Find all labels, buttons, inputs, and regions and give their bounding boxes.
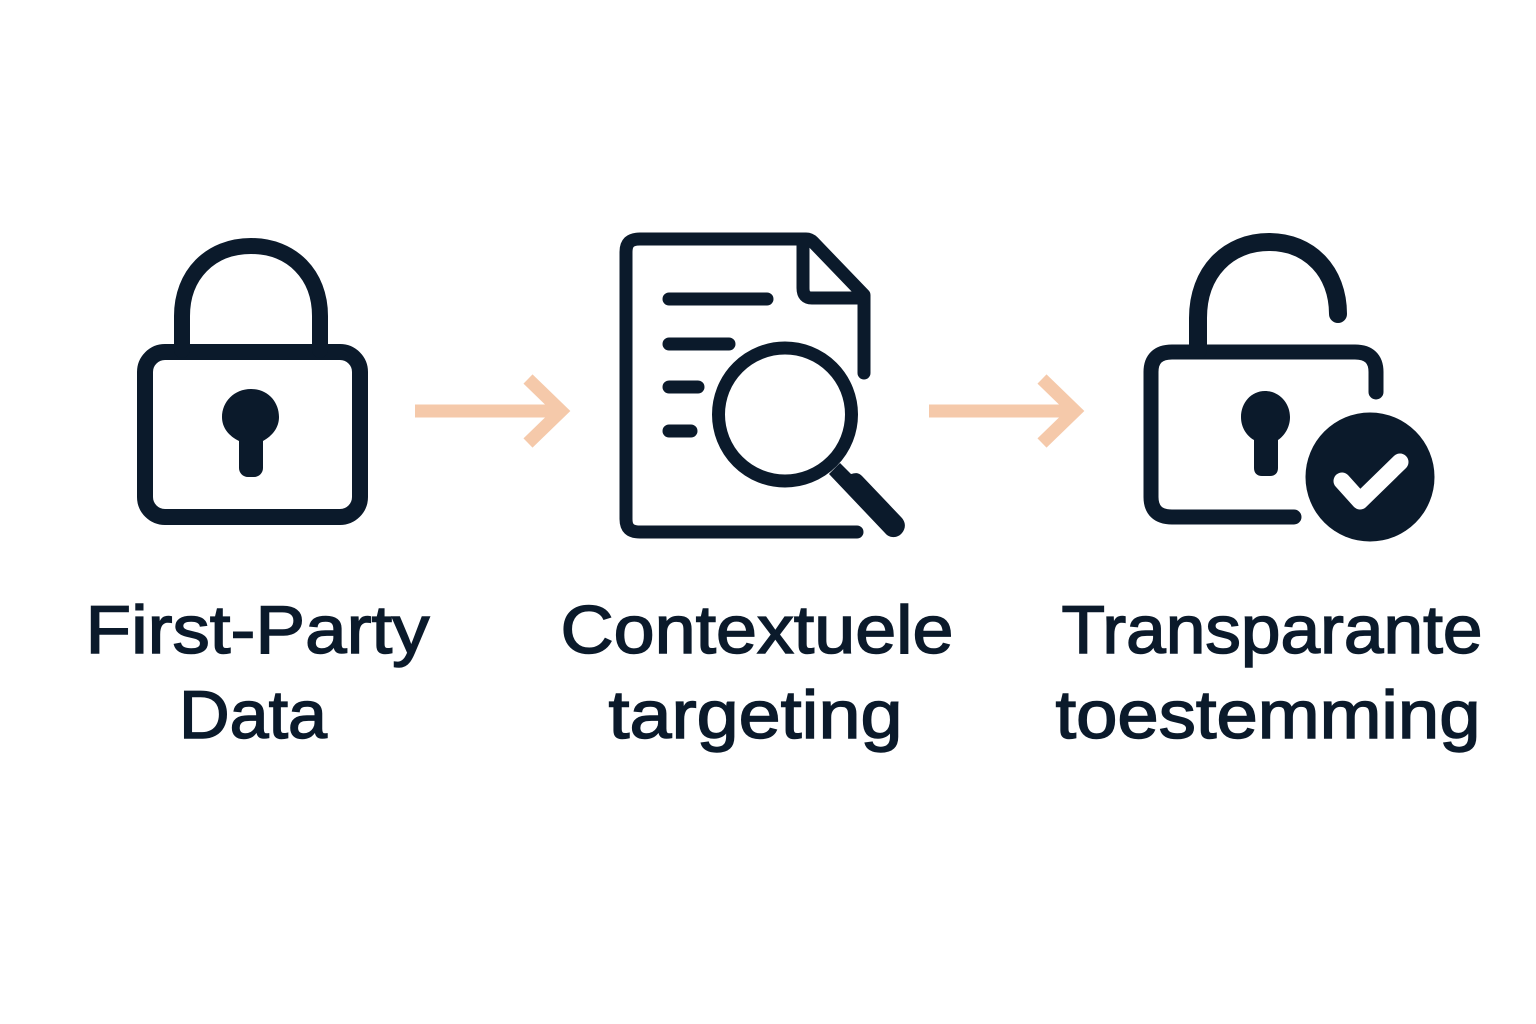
label: Contextuele targeting: targeting [608,677,902,753]
arrow: second to third step [929,379,1076,443]
label: First-Party Data: Data [179,677,327,753]
arrow: first to second step [415,379,562,443]
icon: open padlock with check badge [1151,242,1434,542]
label: First-Party Data: First-Party [86,592,429,668]
icon: closed padlock [145,246,360,517]
label: Transparante toestemming: Transparante [1062,592,1482,668]
label: Transparante toestemming: toestemming [1056,677,1480,753]
icon: document with magnifying glass [626,239,905,537]
label: Contextuele targeting [560,592,954,753]
label: Contextuele targeting: Contextuele [560,592,954,668]
label: First-Party Data [86,592,429,753]
label: Transparante toestemming [1056,592,1482,753]
